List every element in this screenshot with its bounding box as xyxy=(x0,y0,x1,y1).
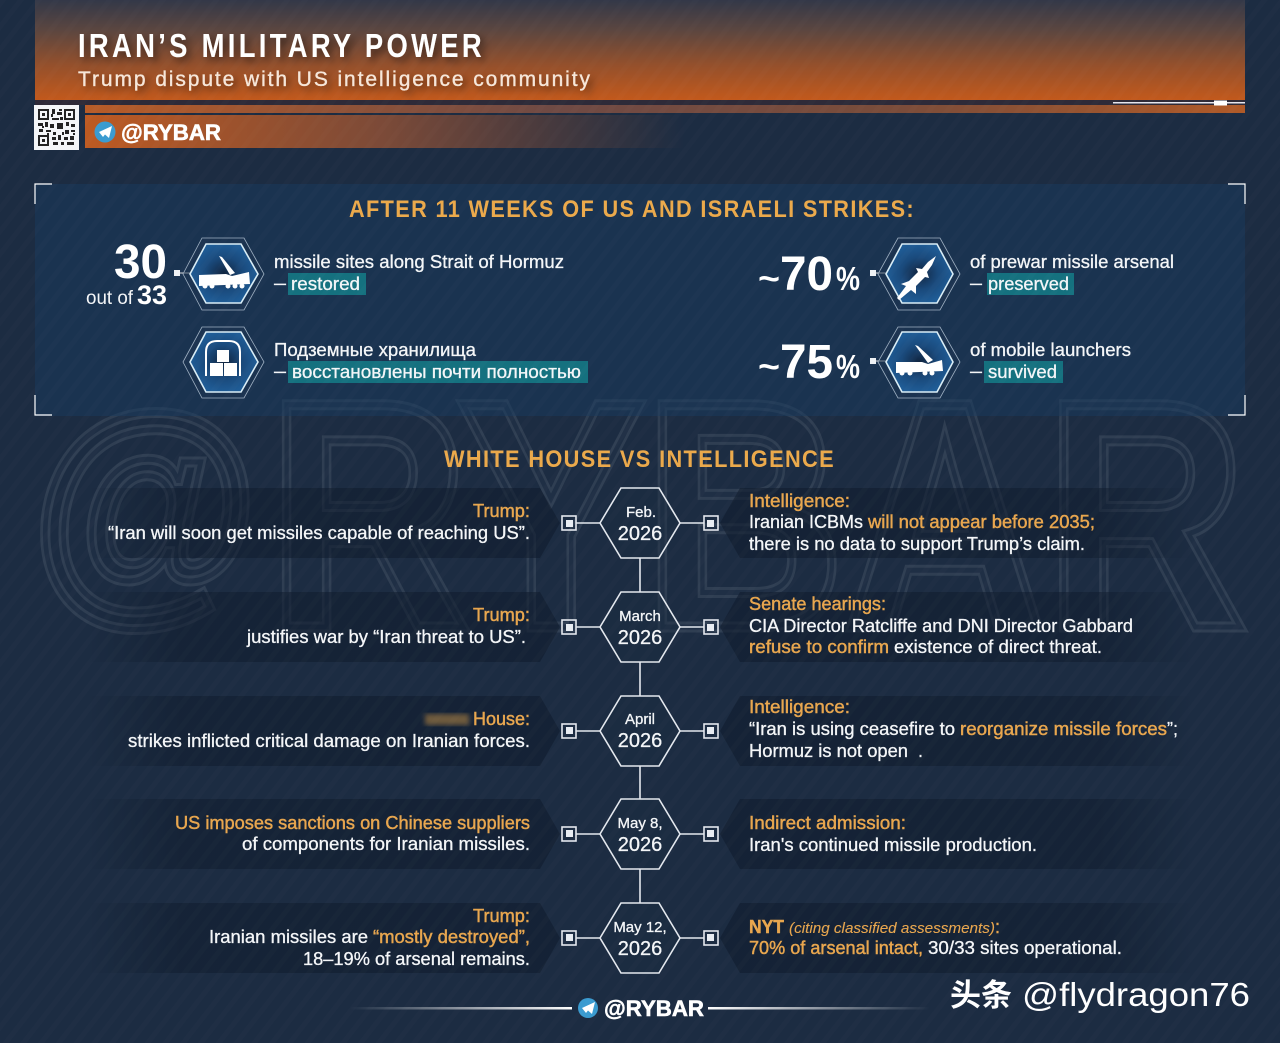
source watermark: @flydragon76 xyxy=(1022,976,1250,1013)
QR code xyxy=(34,105,79,150)
timeline connector xyxy=(639,558,641,903)
text: missile sites: restored xyxy=(291,274,360,294)
source watermark: 头条 xyxy=(950,978,1012,1013)
hexagon date: Feb. xyxy=(626,504,656,521)
icon: launcher xyxy=(174,238,264,310)
text: missile sites: missile sites along Strait of Hormuz xyxy=(274,252,564,272)
hexagon date: 2026 xyxy=(618,523,662,545)
stat: 75 percent: % xyxy=(836,348,860,385)
hexagon date: 2026 xyxy=(618,834,662,856)
text: indirect admission xyxy=(749,813,1037,855)
icon: underground storage xyxy=(183,327,264,398)
text: mobile launchers xyxy=(970,340,1131,383)
text: NYT: : xyxy=(995,917,1000,937)
text: Intelligence: reorganize missile forces xyxy=(960,719,1167,739)
text: prewar arsenal: of prewar missile arsenal xyxy=(970,252,1174,272)
stat: 70 percent: 70 xyxy=(780,248,833,301)
text: Senate hearings xyxy=(749,594,1133,657)
text: sanctions xyxy=(175,813,530,854)
hexagon date: May 8, xyxy=(617,815,663,832)
heading: AFTER 11 WEEKS OF US AND ISRAELI STRIKES: xyxy=(349,196,915,223)
text: Intelligence xyxy=(749,491,1095,554)
hexagon date: 2026 xyxy=(618,938,662,960)
hexagon date: 2026 xyxy=(618,730,662,752)
source watermark xyxy=(950,976,1250,1013)
stat: 30 of 33: 33 xyxy=(137,280,167,310)
text: NYT: 30/33 sites operational. xyxy=(928,938,1122,958)
text: Intelligence: . xyxy=(918,741,923,761)
text: underground storage: Подземные хранилища xyxy=(274,340,477,360)
row: March 2026 xyxy=(85,592,1195,662)
text: Intelligence: there is no data to support Trump’s claim. xyxy=(749,534,1085,554)
text: Trump: “Iran will soon get missiles capable of reaching US”. xyxy=(108,523,530,543)
text: Trump xyxy=(108,501,530,543)
text: missile sites xyxy=(274,252,564,295)
text: indirect admission: Indirect admission: xyxy=(749,813,906,833)
hexagon date: May 12, xyxy=(613,919,667,936)
stat: 75 percent xyxy=(758,336,860,389)
text: Trump: Iranian missiles are xyxy=(209,927,368,947)
brand bar xyxy=(85,115,685,148)
text: NYT: (citing classified assessments) xyxy=(789,921,995,937)
text: Trump: justifies war by “Iran threat to US”. xyxy=(246,627,526,647)
text: Trump: 18–19% of arsenal remains. xyxy=(303,949,530,969)
header banner xyxy=(35,0,1245,113)
text: mobile launchers: — xyxy=(970,361,982,381)
icon: missile xyxy=(870,238,960,310)
text: Senate hearings: CIA Director Ratcliffe and DNI Director Gabbard xyxy=(749,616,1133,636)
text: Senate hearings: existence of direct threat. xyxy=(894,637,1102,657)
footer logo xyxy=(350,996,930,1021)
text: Trump: “mostly destroyed”, xyxy=(373,927,530,947)
stat: 30 of 33 xyxy=(86,236,167,310)
text: Trump: Trump: xyxy=(473,605,530,625)
text: Trump xyxy=(209,906,530,969)
text: Senate hearings: refuse to confirm xyxy=(749,637,889,657)
text: sanctions: of components for Iranian missiles. xyxy=(242,834,530,854)
header slider line xyxy=(1113,100,1245,106)
row: May 12 2026 xyxy=(85,903,1195,973)
hexagon date xyxy=(562,799,718,869)
text: Intelligence: Intelligence: xyxy=(749,491,850,511)
text: prewar arsenal: preserved xyxy=(988,274,1069,294)
stat: 30 of 33: 30 xyxy=(114,236,167,289)
brand name: @RYBAR xyxy=(121,120,221,145)
stat: 75 percent: ~ xyxy=(758,348,780,386)
corner brackets xyxy=(35,184,1245,415)
text: Intelligence: ”; xyxy=(1167,719,1178,739)
text: Trump: Trump: xyxy=(473,501,530,521)
stat: 30 of 33: out of xyxy=(86,288,134,309)
text: Intelligence: “Iran is using ceasefire to xyxy=(749,719,955,739)
text: Trump xyxy=(246,605,530,647)
icon: mobile launcher xyxy=(870,327,960,398)
row: May 8 2026 xyxy=(85,799,1195,869)
hexagon date: March xyxy=(619,608,661,625)
hexagon date xyxy=(562,903,718,973)
text: House: strikes inflicted critical damage on Iranian forces. xyxy=(128,731,530,751)
row: April 2026 xyxy=(85,696,1195,766)
text: House xyxy=(128,709,530,751)
footer logo: @RYBAR xyxy=(604,996,704,1021)
text: Trump: Trump: xyxy=(473,906,530,926)
text: Intelligence: Intelligence: xyxy=(749,697,850,717)
text: prewar arsenal: — xyxy=(970,273,982,293)
watermark: @RYBAR outline: @ xyxy=(32,364,258,643)
text: underground storage: — xyxy=(274,361,286,381)
text: indirect admission: Iran's continued missile production. xyxy=(749,835,1037,855)
hexagon date xyxy=(562,488,718,558)
watermark: @RYBAR outline: @ xyxy=(32,364,258,643)
text: Intelligence: will not appear before 2035; xyxy=(867,512,1095,532)
text: mobile launchers: of mobile launchers xyxy=(970,340,1131,360)
row: Feb 2026 xyxy=(85,488,1195,558)
title: IRAN’S MILITARY POWER xyxy=(78,27,485,64)
text: Intelligence: Iranian ICBMs xyxy=(749,512,863,532)
text: Intelligence xyxy=(749,697,1178,761)
text: mobile launchers: survived xyxy=(988,362,1057,382)
subtitle: Trump dispute with US intelligence community xyxy=(78,68,590,91)
hexagon date: April xyxy=(625,711,655,728)
icon: telegram xyxy=(578,998,598,1018)
text: missile sites: — xyxy=(274,273,286,293)
text: Intelligence: Hormuz is not open xyxy=(749,741,908,761)
text: prewar arsenal xyxy=(970,252,1174,295)
stat: 75 percent: 75 xyxy=(780,336,833,389)
text: NYT: NYT xyxy=(749,917,784,937)
hexagon date: 2026 xyxy=(618,627,662,649)
hexagon date xyxy=(562,696,718,766)
panel: after 11 weeks xyxy=(35,184,1245,416)
heading: white house vs intelligence: WHITE HOUSE VS INTELLIGENCE xyxy=(444,446,835,473)
text: underground storage xyxy=(274,340,588,383)
stat: 70 percent: % xyxy=(836,260,860,297)
stat: 70 percent xyxy=(758,248,860,301)
text: House: House: xyxy=(473,709,530,729)
hexagon date xyxy=(562,592,718,662)
text: Senate hearings: Senate hearings: xyxy=(749,594,886,614)
stat: 70 percent: ~ xyxy=(758,260,780,298)
text: sanctions: US imposes sanctions on Chinese suppliers xyxy=(175,813,530,833)
text: NYT xyxy=(749,917,1122,958)
text: NYT: 70% of arsenal intact, xyxy=(749,938,923,958)
icon: telegram xyxy=(94,122,116,142)
text: underground storage: восстановлены почти полностью xyxy=(292,362,581,382)
